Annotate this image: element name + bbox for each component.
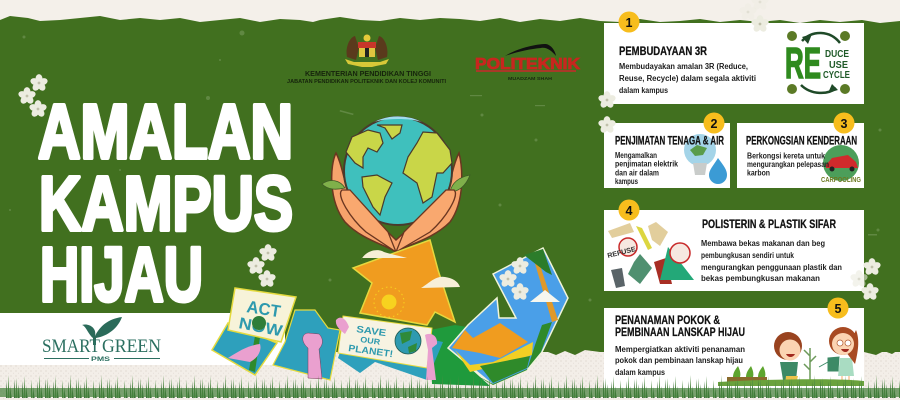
icon: light bulb and water drop <box>684 134 727 184</box>
heading 5 <box>615 315 745 339</box>
badge 4: 4 <box>626 204 633 218</box>
text 5: pokok dan pembinaan lanskap hijau <box>615 356 743 365</box>
heading 4: POLISTERIN & PLASTIK SIFAR <box>702 219 837 231</box>
illustration: save our planet banner <box>336 316 443 380</box>
title: Amalan Kampus Hijau: AMALAN <box>38 89 293 175</box>
text 1: Reuse, Recycle) dalam segala aktiviti <box>619 74 756 83</box>
illustration: act now sign <box>212 288 296 375</box>
text 3: karbon <box>747 168 770 178</box>
text 1 <box>619 62 756 95</box>
text 3 <box>747 152 829 178</box>
icon: plastic waste: REFUSE <box>607 246 637 260</box>
logo: Malaysian coat of arms <box>345 34 389 67</box>
text 2: dan air dalam <box>615 168 659 178</box>
icon: plastic waste <box>607 222 694 288</box>
illustration: green hill <box>430 325 490 386</box>
illustration: save our planet banner: PLANET! <box>348 343 394 360</box>
heading 5: PENANAMAN POKOK & <box>615 315 720 327</box>
illustration: save our planet banner: OUR <box>360 335 381 347</box>
badge 5: 5 <box>835 302 842 316</box>
ministry name: JABATAN PENDIDIKAN POLITEKNIK DAN KOLEJ KOMUNITI <box>287 79 446 85</box>
speckled paper bottom <box>0 350 900 400</box>
text 4: mengurangkan penggunaan plastik dan <box>701 263 842 272</box>
panel 2: Penjimatan Tenaga & Air <box>604 123 730 188</box>
heading 5: PEMBINAAN LANSKAP HIJAU <box>615 327 745 339</box>
text 1: dalam kampus <box>619 86 668 95</box>
badge 4 <box>618 200 640 220</box>
green patch right of bottom paper <box>864 300 900 355</box>
text 4 <box>701 239 842 283</box>
ministry name <box>287 69 446 85</box>
logo: Politeknik Muadzam Shah <box>475 44 580 81</box>
logo: Politeknik Muadzam Shah: MUADZAM SHAH <box>508 76 552 81</box>
text 2: kampus <box>615 177 638 186</box>
illustration: orange recycle arrow with sun <box>353 240 460 325</box>
title: Amalan Kampus Hijau: KAMPUS <box>39 161 293 247</box>
illustration: save our planet banner: SAVE <box>356 324 387 339</box>
badge 3: 3 <box>841 117 848 131</box>
illustration: act now sign: NOW <box>237 315 285 341</box>
badge 1: 1 <box>626 16 633 30</box>
illustration: act now sign: ACT <box>245 297 283 321</box>
heading 1: PEMBUDAYAAN 3R <box>619 46 708 58</box>
panel 3: Perkongsian Kenderaan <box>737 123 864 188</box>
text 4: Membawa bekas makanan dan beg <box>701 239 825 248</box>
grass strip <box>0 372 900 398</box>
panel 5: Penanaman Pokok & Pembinaan Lanskap Hijau <box>604 308 864 390</box>
illustration: hands holding globe <box>322 116 470 252</box>
text 5 <box>615 345 745 377</box>
illustration: fist panel <box>273 310 340 380</box>
text 5: Mempergiatkan aktiviti penanaman <box>615 345 745 354</box>
illustration: landscape recycle arrow <box>448 248 568 385</box>
panel 1: Pembudayaan 3R <box>604 23 864 104</box>
badge 2: 2 <box>711 117 718 131</box>
logo: Smart Green PMS <box>42 317 161 363</box>
text 4: pembungkusan sendiri untuk <box>701 251 794 260</box>
icon: reduce reuse recycle: DUCE <box>825 49 849 60</box>
text 2: penjimatan elektrik <box>615 160 678 168</box>
text 4: bekas pembungkusan makanan <box>701 274 820 283</box>
flowers near panels <box>597 0 882 301</box>
badge 3 <box>834 112 854 134</box>
illustration: children planting <box>718 327 864 386</box>
logo: Smart Green PMS: GREEN <box>102 336 161 357</box>
text 2: Mengamalkan <box>615 151 657 160</box>
badge 2 <box>704 112 724 134</box>
icon: reduce reuse recycle: CYCLE <box>823 70 850 81</box>
icon: carpooling: CARPOOLING <box>821 177 861 184</box>
white strip bottom left <box>0 313 285 373</box>
text 2 <box>615 151 678 186</box>
text 3: Berkongsi kereta untuk <box>747 152 825 160</box>
torn paper top strip <box>0 0 900 23</box>
title: Amalan Kampus Hijau: HIJAU <box>40 232 203 318</box>
flowers near title <box>17 74 278 288</box>
icon: reduce reuse recycle: USE <box>829 60 848 71</box>
title: Amalan Kampus Hijau <box>38 89 293 318</box>
badge 5 <box>828 298 848 318</box>
ministry name: KEMENTERIAN PENDIDIKAN TINGGI <box>305 69 431 78</box>
badge 1 <box>618 12 640 32</box>
logo: Smart Green PMS: PMS <box>91 356 111 363</box>
logo: Smart Green PMS: SMART <box>42 336 100 357</box>
heading 2: PENJIMATAN TENAGA & AIR <box>615 136 724 148</box>
text 5: dalam kampus <box>615 368 665 377</box>
text 3: mengurangkan pelepasan <box>747 160 829 169</box>
icon: reduce reuse recycle: RE <box>785 39 821 88</box>
panel 4: Polisterin & Plastik Sifar <box>604 210 864 291</box>
text 1: Membudayakan amalan 3R (Reduce, <box>619 62 748 71</box>
logo: Politeknik Muadzam Shah: POLITEKNIK <box>475 56 580 73</box>
